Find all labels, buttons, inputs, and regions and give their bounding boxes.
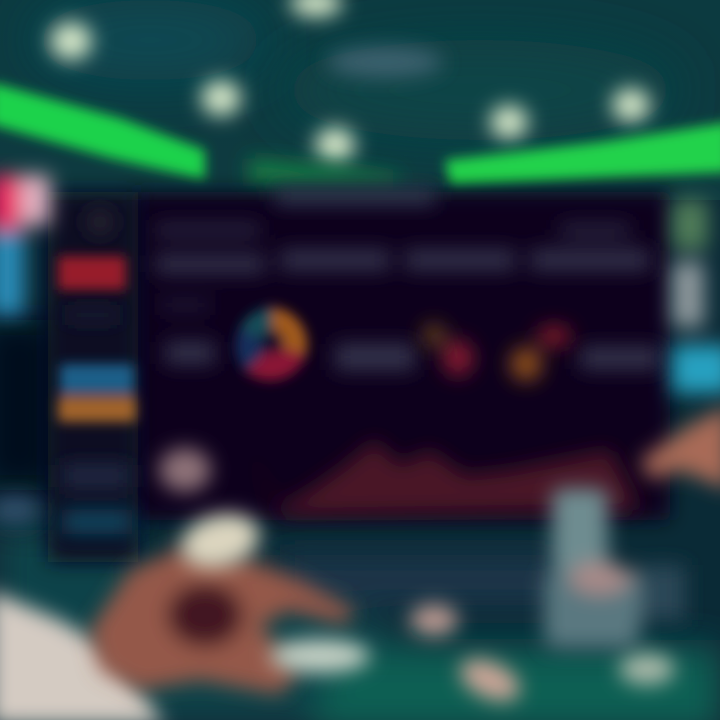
text block: blurred table rows bbox=[155, 225, 660, 370]
panel: far left dark block bbox=[0, 320, 60, 490]
object: right edge poster bbox=[672, 200, 720, 393]
monitor: dark screen bbox=[132, 192, 670, 520]
object: left edge grey token bbox=[0, 496, 41, 524]
heading: blurred screen title bbox=[275, 188, 435, 204]
hand: foreground hand holding chip bbox=[90, 548, 355, 695]
band: left green stripe bbox=[0, 82, 205, 180]
sleeve: white cuff bbox=[0, 590, 165, 720]
band: right green stripe bbox=[445, 122, 720, 186]
chart: pie chart bbox=[236, 307, 307, 381]
block: sidebar small icon bbox=[87, 210, 113, 234]
object: small pale token bbox=[159, 448, 211, 492]
chips: scattered table chips bbox=[410, 604, 675, 710]
chart: small orange and red pie bbox=[510, 326, 571, 381]
chart: small red and orange pie bbox=[423, 324, 473, 376]
background: green table surface bbox=[0, 530, 720, 720]
bottle: grey glass bottle bbox=[544, 488, 685, 648]
chip: white chip held in fingers bbox=[175, 506, 265, 576]
panel: left sidebar bbox=[48, 192, 138, 562]
chip: white chip under thumb bbox=[270, 639, 370, 673]
text block: sidebar blurred rows bbox=[62, 310, 132, 534]
lights: glowing ceiling dots bbox=[50, 0, 650, 163]
chart: red mountain area chart bbox=[250, 440, 640, 515]
cloud: faint grey smudge bbox=[327, 47, 443, 77]
object: pink and blue left poster bbox=[0, 175, 50, 315]
band: faint center green stripe bbox=[248, 158, 400, 186]
block: sidebar red button bbox=[58, 256, 126, 290]
hand: right hand bbox=[640, 405, 720, 490]
block: sidebar blue and orange card bbox=[58, 364, 136, 422]
